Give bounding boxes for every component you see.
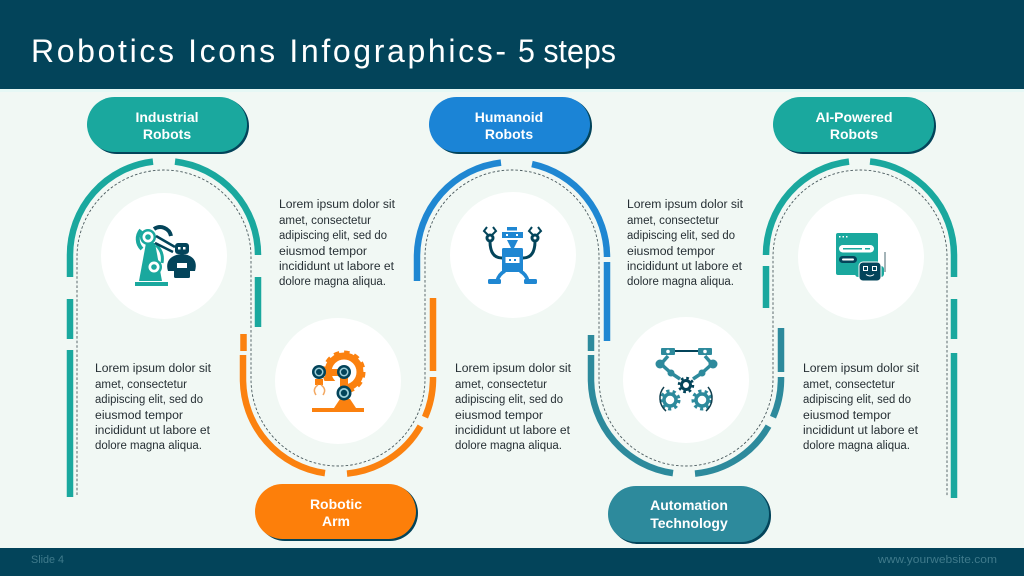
- text block: step 3: incididunt ut labore et: [455, 425, 571, 437]
- text block: step 1: [95, 363, 212, 452]
- step 2 heading pill: [255, 484, 418, 541]
- step 5 icon circle: AI chatbot window: [798, 194, 924, 320]
- text block: step 1: incididunt ut labore et: [95, 425, 211, 437]
- footer: slide number: Slide 4: [31, 554, 64, 566]
- text block: step 4: incididunt ut labore et: [627, 261, 743, 273]
- step 2 heading pill: Robotic: [310, 496, 362, 512]
- text block: step 5: [803, 363, 920, 452]
- step 3 heading pill: Humanoid: [475, 109, 543, 125]
- text block: step 3: dolore magna aliqua.: [455, 440, 562, 452]
- step 4 ring: blue-teal segments: [591, 328, 781, 474]
- footer bar: [0, 548, 1024, 576]
- dashed connector path: [77, 170, 947, 497]
- text block: step 4: eiusmod tempor: [627, 246, 715, 258]
- step 5 heading pill: AI-Powered: [815, 109, 893, 125]
- step 1 ring: teal segments: [70, 162, 258, 497]
- text block: step 2: eiusmod tempor: [279, 246, 367, 258]
- title: 5 steps: [518, 33, 616, 69]
- step 5 ring: teal segments: [766, 162, 954, 498]
- step 5 heading pill: Robots: [830, 126, 878, 142]
- text block: step 2: amet, consectetur: [279, 215, 371, 227]
- step 2 icon circle: robotic arm with gear: [275, 318, 401, 444]
- step 5 heading pill: [773, 97, 936, 154]
- text block: step 1: eiusmod tempor: [95, 410, 183, 422]
- step 3 heading pill: [429, 97, 592, 154]
- text block: step 2: adipiscing elit, sed do: [279, 230, 387, 242]
- text block: step 5: amet, consectetur: [803, 379, 895, 391]
- text block: step 4: amet, consectetur: [627, 215, 719, 227]
- text block: step 4: dolore magna aliqua.: [627, 276, 734, 288]
- text block: step 2: incididunt ut labore et: [279, 261, 395, 273]
- text block: step 3: [455, 363, 572, 452]
- text block: step 4: [627, 199, 744, 288]
- text block: step 1: Lorem ipsum dolor sit: [95, 363, 212, 375]
- step 3 heading pill: Robots: [485, 126, 533, 142]
- step 4 heading pill: Automation: [650, 497, 728, 513]
- step 4 heading pill: Technology: [650, 515, 728, 531]
- text block: step 2: [279, 199, 396, 288]
- step 4 heading pill: [608, 486, 771, 544]
- step 3 ring: blue segments: [417, 163, 607, 341]
- step 3 icon circle: humanoid robot: [450, 192, 576, 318]
- title: Robotics Icons Infographics-: [31, 33, 506, 69]
- step 2 heading pill: Arm: [322, 513, 350, 529]
- step 4 icon circle: automation arms and gears: [623, 317, 749, 443]
- step 1 heading pill: Robots: [143, 126, 191, 142]
- text block: step 3: eiusmod tempor: [455, 410, 543, 422]
- footer: website: www.yourwebsite.com: [877, 554, 997, 566]
- step 1 icon circle: industrial robot: [101, 193, 227, 319]
- text block: step 3: Lorem ipsum dolor sit: [455, 363, 572, 375]
- text block: step 2: Lorem ipsum dolor sit: [279, 199, 396, 211]
- text block: step 5: dolore magna aliqua.: [803, 440, 910, 452]
- text block: step 1: dolore magna aliqua.: [95, 440, 202, 452]
- text block: step 1: adipiscing elit, sed do: [95, 394, 203, 406]
- text block: step 5: incididunt ut labore et: [803, 425, 919, 437]
- text block: step 5: Lorem ipsum dolor sit: [803, 363, 920, 375]
- text block: step 4: adipiscing elit, sed do: [627, 230, 735, 242]
- text block: step 4: Lorem ipsum dolor sit: [627, 199, 744, 211]
- step 1 heading pill: Industrial: [135, 109, 199, 125]
- text block: step 5: eiusmod tempor: [803, 410, 891, 422]
- text block: step 2: dolore magna aliqua.: [279, 276, 386, 288]
- text block: step 3: adipiscing elit, sed do: [455, 394, 563, 406]
- step 2 ring: orange segments: [243, 298, 433, 474]
- text block: step 3: amet, consectetur: [455, 379, 547, 391]
- header bar: [0, 0, 1024, 89]
- text block: step 5: adipiscing elit, sed do: [803, 394, 911, 406]
- step 1 heading pill: [87, 97, 249, 154]
- text block: step 1: amet, consectetur: [95, 379, 187, 391]
